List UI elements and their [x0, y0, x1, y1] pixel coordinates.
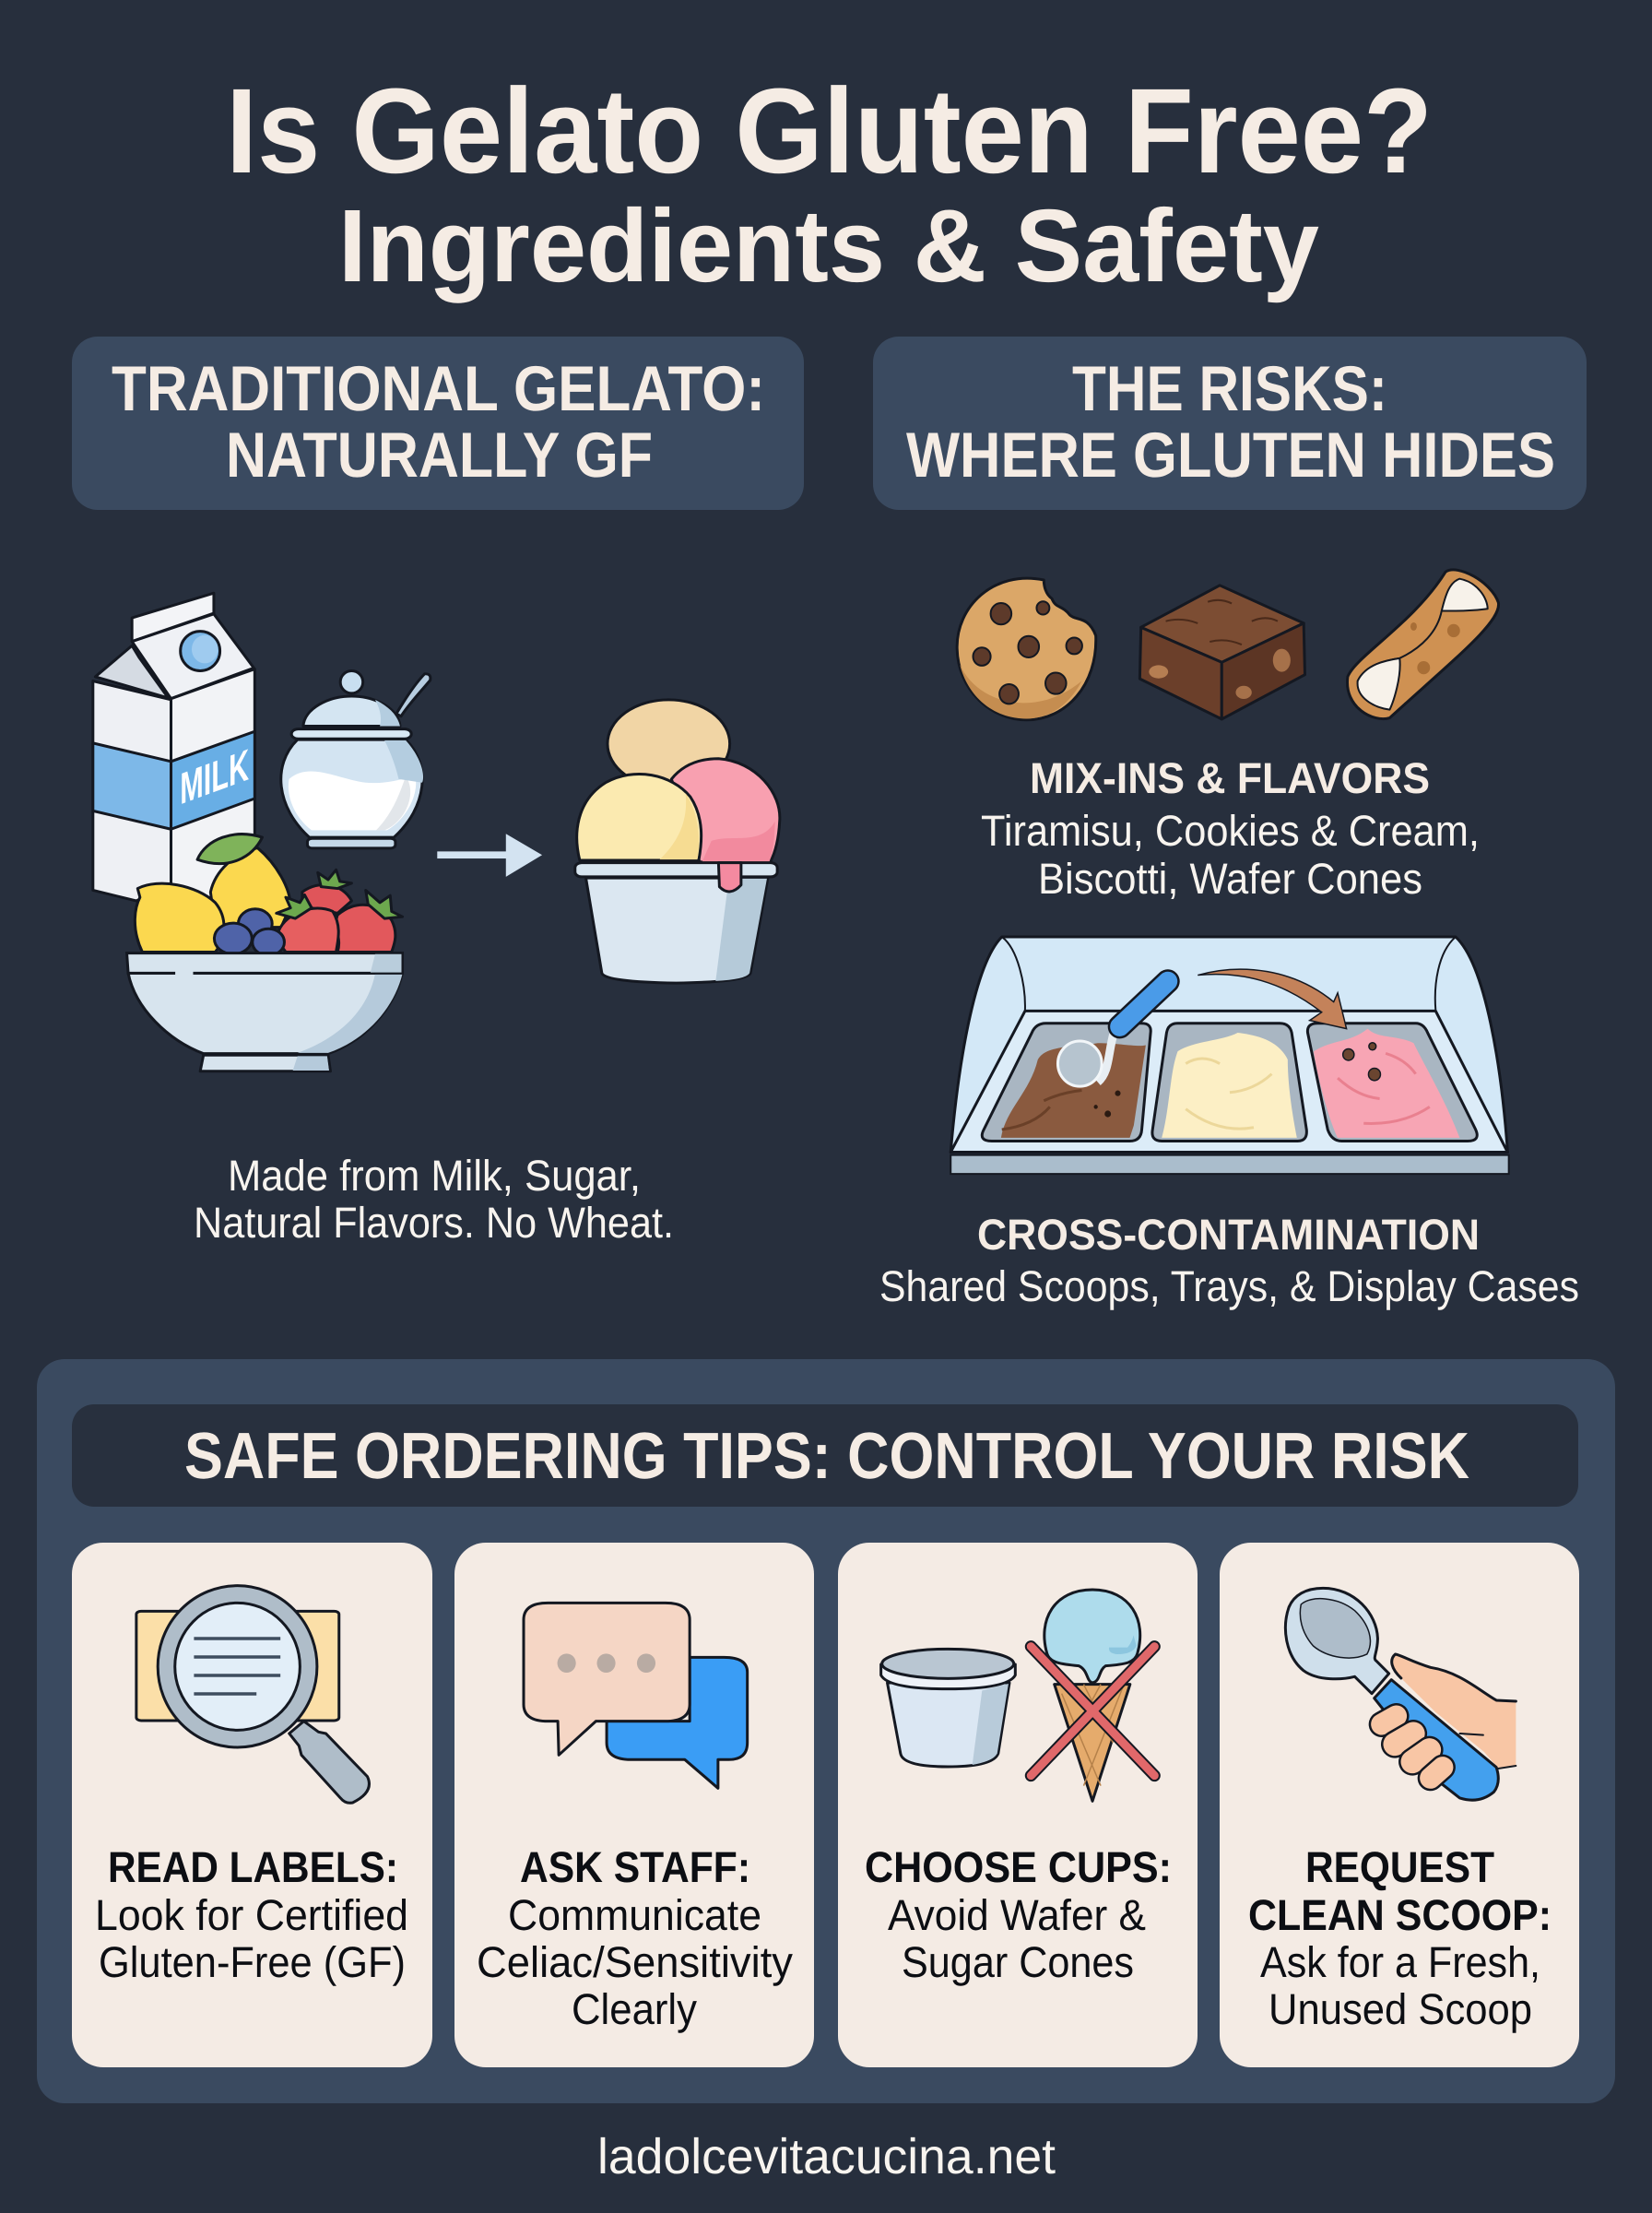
title: Ingredients & Safety [338, 188, 1319, 303]
text: mix-ins and flavors: MIX-INS & FLAVORS [1030, 753, 1430, 802]
panel heading: the risks: THE RISKS: [1072, 353, 1387, 424]
icon: hand holding clean scoop [1285, 1588, 1516, 1800]
caption: ingredients: Made from Milk, Sugar, [228, 1151, 641, 1200]
icon: bowl of fruit [127, 834, 403, 1071]
text: read labels: Look for Certified [95, 1890, 408, 1939]
heading bar: safe ordering tips: SAFE ORDERING TIPS: CONTROL YOUR RISK [184, 1420, 1469, 1493]
text: request clean scoop: REQUEST [1305, 1842, 1494, 1891]
icon: speech bubbles [524, 1603, 748, 1788]
panel: safe ordering tips [37, 1359, 1615, 2103]
icon: brownie [1139, 586, 1304, 719]
panel heading: traditional gelato: TRADITIONAL GELATO: [112, 353, 765, 424]
text: ask staff [477, 1842, 793, 2033]
caption: ingredients [194, 1151, 674, 1247]
text: mix-ins and flavors: Tiramisu, Cookies & Cream, [981, 806, 1480, 855]
text: mix-ins and flavors [981, 753, 1480, 903]
icon: milk carton [93, 593, 254, 920]
arrow [437, 834, 542, 877]
card: ask staff [454, 1543, 814, 2067]
text: choose cups: CHOOSE CUPS: [865, 1842, 1172, 1891]
icon: magnifying glass over label [136, 1586, 369, 1803]
text: request clean scoop: CLEAN SCOOP: [1248, 1890, 1552, 1939]
text: choose cups: Avoid Wafer & [888, 1890, 1146, 1939]
icon: cookie [957, 578, 1096, 720]
illustration: mix-ins and display case [950, 570, 1509, 1174]
text: cross-contamination [879, 1210, 1579, 1310]
text: ask staff: Celiac/Sensitivity [477, 1937, 793, 1986]
text: ask staff: Communicate [508, 1890, 761, 1939]
icon: sugar bowl [281, 670, 431, 848]
caption: ingredients: Natural Flavors. No Wheat. [194, 1198, 674, 1247]
card: request clean scoop [1220, 1543, 1579, 2067]
panel heading: the risks: WHERE GLUTEN HIDES [906, 420, 1555, 491]
title: Is Gelato Gluten Free? [226, 63, 1433, 198]
text: read labels: READ LABELS: [108, 1842, 398, 1891]
footer: website: ladolcevitacucina.net [597, 2129, 1056, 2184]
card: choose cups [838, 1543, 1198, 2067]
text: read labels [95, 1842, 408, 1986]
text: choose cups [865, 1842, 1172, 1986]
text: mix-ins and flavors: Biscotti, Wafer Cones [1038, 854, 1422, 903]
icon: gelato display case with shared scoop [950, 937, 1509, 1174]
text: request clean scoop: Ask for a Fresh, [1260, 1937, 1540, 1986]
panel heading: the risks [873, 337, 1587, 510]
text: cross-contamination: CROSS-CONTAMINATION [977, 1210, 1480, 1259]
text: ask staff: Clearly [572, 1984, 697, 2033]
icon: cannoli [1347, 570, 1499, 719]
panel heading: traditional gelato: NATURALLY GF [226, 420, 653, 491]
text: ask staff: ASK STAFF: [520, 1842, 750, 1891]
panel heading: traditional gelato [72, 337, 804, 510]
icon: cup versus crossed-out cone [881, 1590, 1154, 1801]
text: choose cups: Sugar Cones [902, 1937, 1134, 1986]
text: request clean scoop [1248, 1842, 1552, 2033]
heading bar: safe ordering tips [72, 1404, 1578, 1507]
text: request clean scoop: Unused Scoop [1268, 1984, 1532, 2033]
text: read labels: Gluten-Free (GF) [99, 1937, 406, 1986]
text: cross-contamination: Shared Scoops, Trays, & Display Cases [879, 1261, 1579, 1310]
title [226, 63, 1433, 303]
card: read labels [72, 1543, 432, 2067]
icon: gelato cup with three scoops [575, 700, 780, 983]
illustration: ingredients to gelato [93, 593, 780, 1071]
icon: milk carton: MILK [180, 740, 249, 814]
